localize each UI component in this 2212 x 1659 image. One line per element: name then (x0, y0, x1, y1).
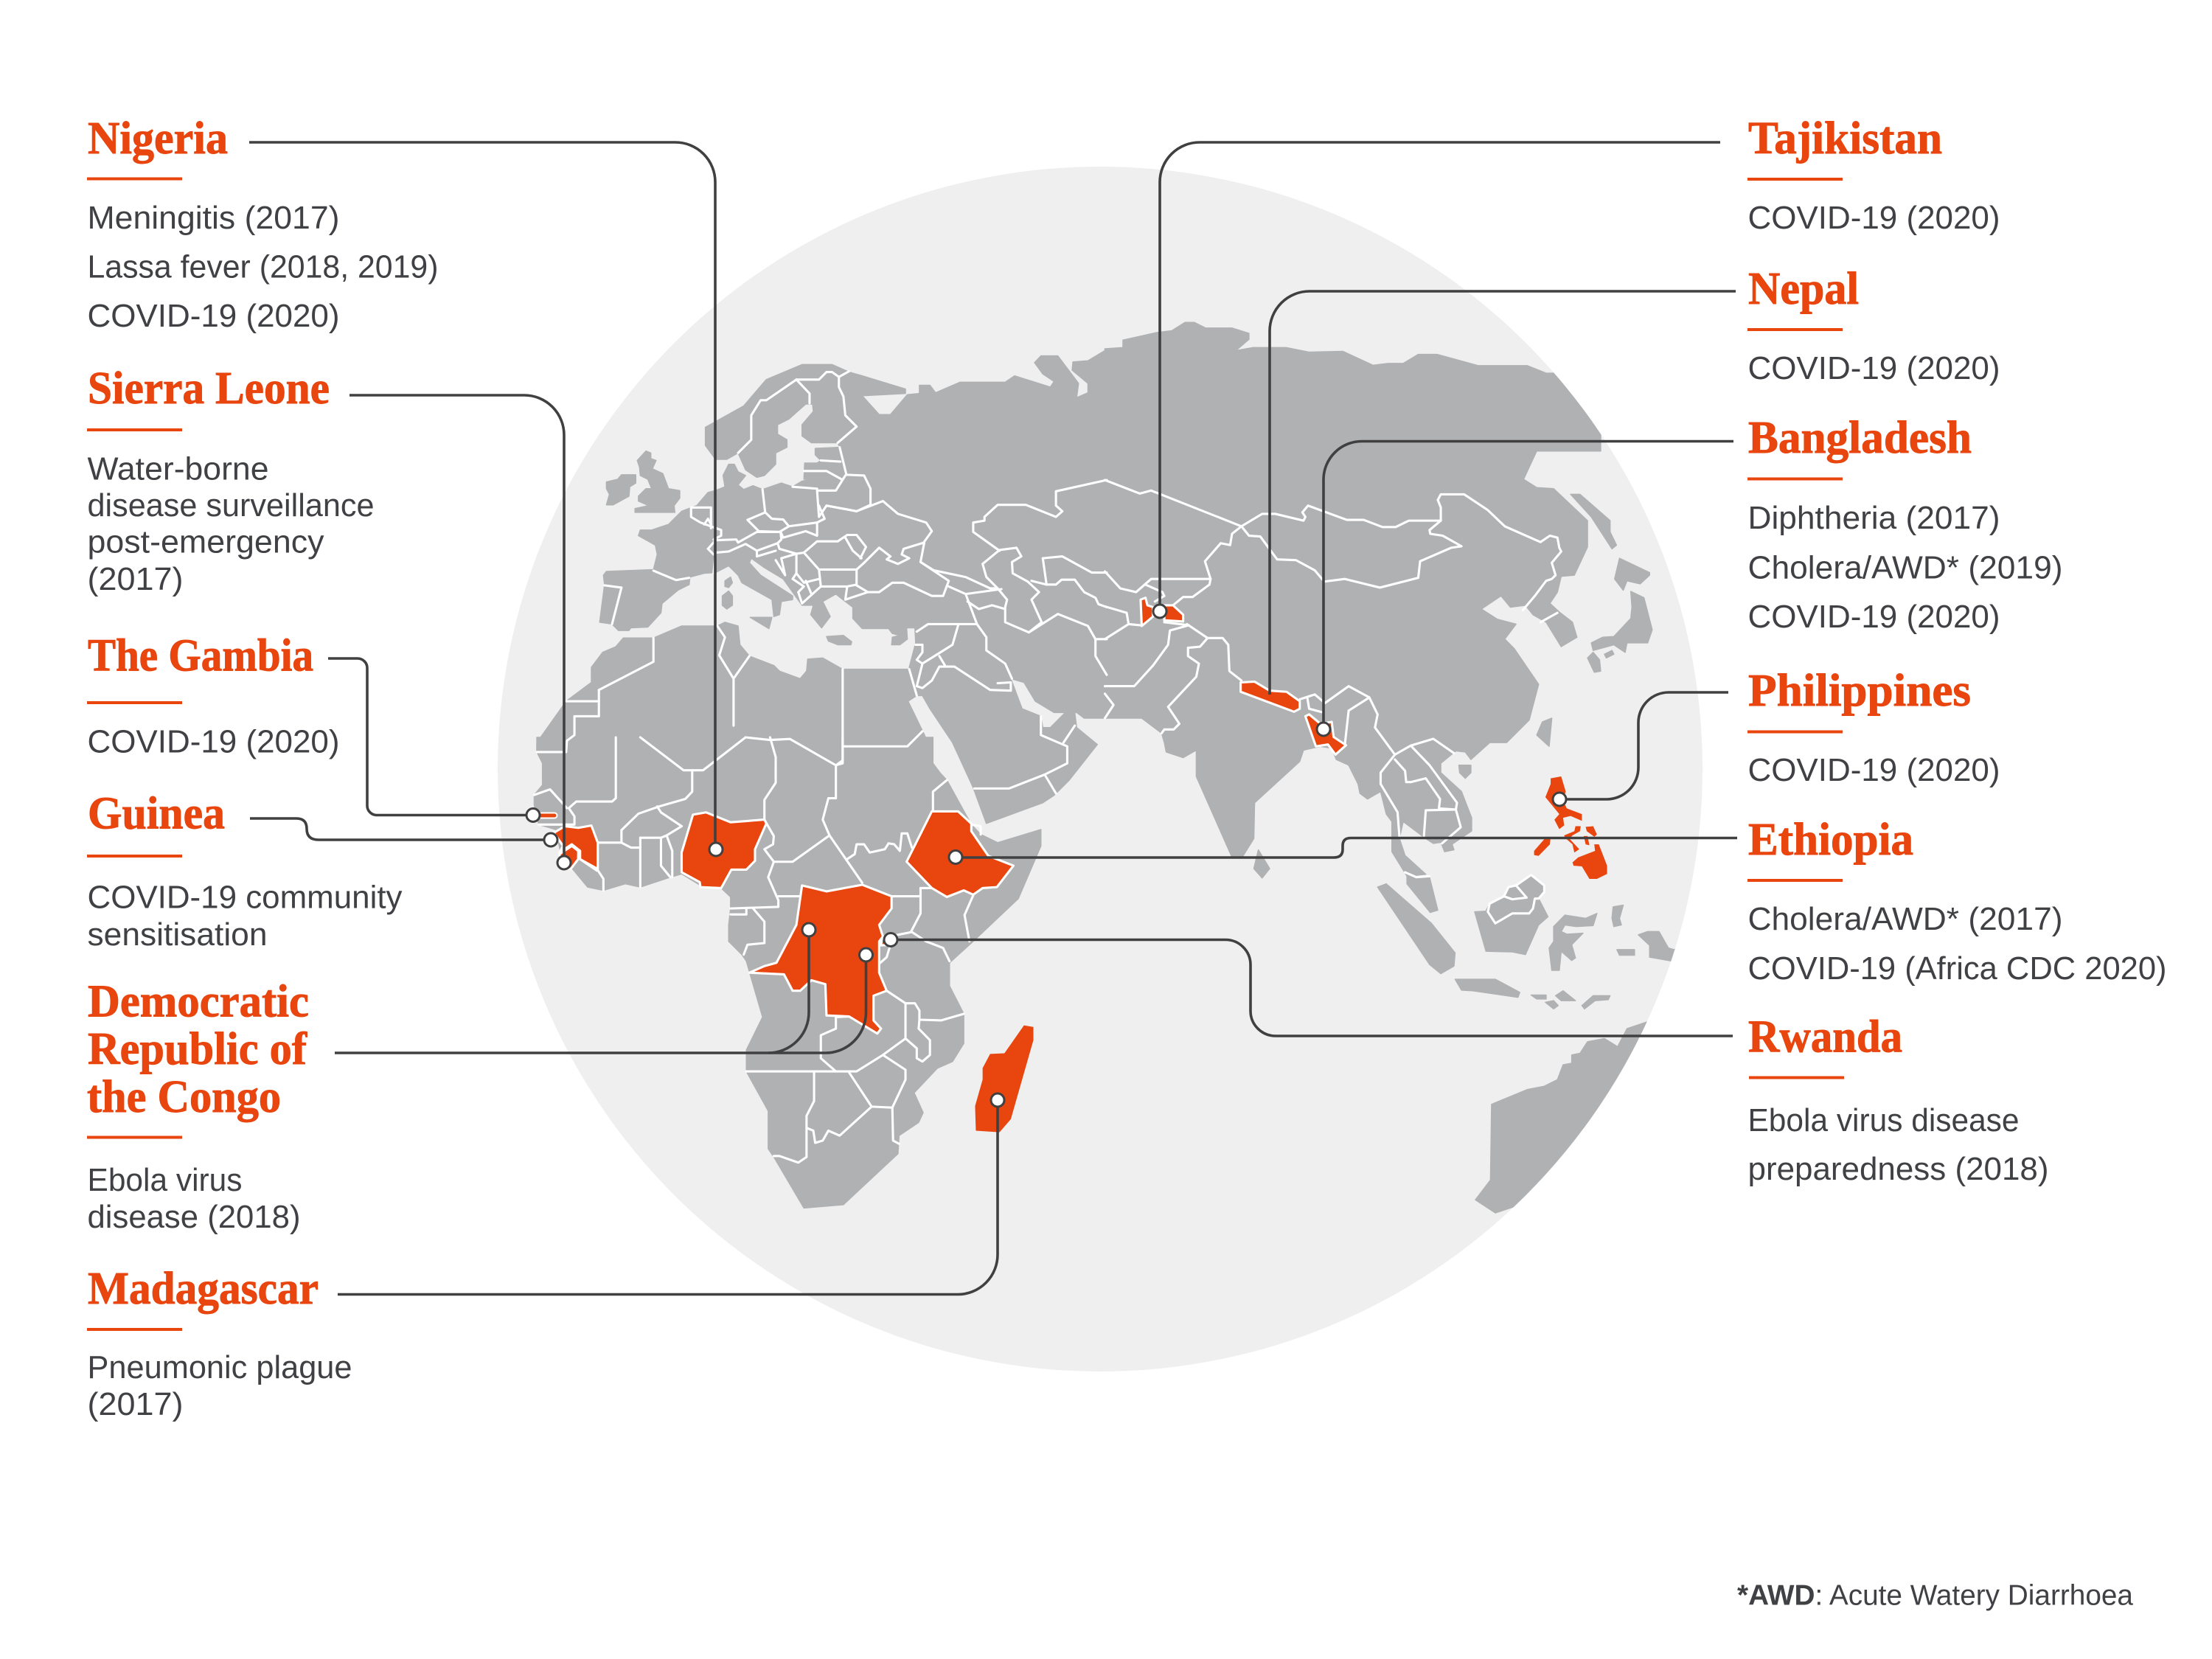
label: Philippines (1747, 666, 2000, 788)
body text: COVID-19 (2020) (1747, 200, 2000, 236)
body text: post-emergency (87, 524, 324, 560)
label: The Gambia (87, 631, 339, 759)
body text (87, 879, 403, 953)
body text: Ebola virus (87, 1162, 242, 1198)
highlighted country: Nepal (1241, 681, 1300, 712)
world map (534, 322, 1697, 1213)
land: Maritime Southeast Asia and Australia (1377, 875, 1697, 1213)
label: Ethiopia (1747, 815, 2166, 987)
body text: COVID-19 (2020) (1747, 599, 2000, 635)
body text (1747, 1102, 2048, 1187)
label: Guinea (87, 789, 403, 953)
highlighted country: Tajikistan (1141, 598, 1183, 626)
body text: Water-borne (87, 451, 268, 487)
country borders: Asia (1105, 480, 1561, 844)
leader line: Ethiopia (949, 838, 1737, 864)
body text: disease (2018) (87, 1199, 301, 1235)
body text: COVID-19 (Africa CDC 2020) (1747, 950, 2166, 987)
heading: Philippines (1748, 666, 1971, 716)
country borders: Malay Peninsula and Borneo (1405, 872, 1544, 923)
heading: Ethiopia (1748, 815, 1913, 865)
leader line: Nepal (1270, 291, 1736, 695)
leader line: The Gambia (328, 658, 540, 821)
heading: Nepal (1748, 264, 1859, 314)
body text: COVID-19 (2020) (1747, 350, 2000, 386)
body text: Ebola virus disease (1747, 1102, 2019, 1138)
leader line: Tajikistan (1153, 142, 1720, 618)
heading: The Gambia (88, 631, 313, 681)
highlighted country: Madagascar (975, 1026, 1034, 1133)
land: Asia (1105, 322, 1652, 878)
body text (87, 1162, 301, 1235)
leader line: Bangladesh (1317, 441, 1733, 736)
label: Nigeria (87, 114, 438, 334)
heading: the Congo (87, 1072, 281, 1122)
globe background (498, 167, 1703, 1371)
heading: Rwanda (1748, 1012, 1902, 1062)
heading: Madagascar (88, 1264, 319, 1314)
heading: Republic of (88, 1024, 307, 1074)
leader line: Madagascar (338, 1093, 1004, 1295)
body text: Pneumonic plague (87, 1349, 352, 1385)
label: Nepal (1747, 264, 2000, 386)
label: Bangladesh (1747, 413, 2063, 635)
highlighted country: The Gambia (540, 813, 554, 818)
body text: Meningitis (2017) (87, 200, 339, 236)
highlighted country: Philippines (1534, 776, 1607, 879)
leader line: Sierra Leone (349, 395, 571, 869)
label: Sierra Leone (87, 364, 375, 597)
label: Tajikistan (1747, 114, 2000, 236)
body text: preparedness (2018) (1747, 1151, 2048, 1187)
body text: COVID-19 community (87, 879, 403, 916)
body text: (2017) (87, 561, 183, 597)
heading: Guinea (88, 789, 225, 839)
body text: COVID-19 (2020) (1747, 752, 2000, 788)
leader line: Democratic Republic of the Congo (335, 923, 873, 1053)
leader line: Nigeria (249, 142, 723, 856)
highlighted country: Democratic Republic of the Congo (749, 885, 891, 1034)
highlighted country: Ethiopia (907, 811, 1013, 897)
body text (87, 451, 375, 597)
highlighted country: Bangladesh (1305, 714, 1346, 754)
country borders: Africa (534, 737, 981, 1163)
heading: Bangladesh (1748, 413, 1972, 463)
label: Madagascar (87, 1264, 352, 1422)
heading: Democratic (88, 976, 309, 1026)
body text (87, 200, 438, 334)
heading (87, 976, 309, 1122)
land: Sub-Saharan Africa (534, 737, 1041, 1208)
body text: Lassa fever (2018, 2019) (87, 249, 438, 285)
highlighted country: Sierra Leone (560, 846, 578, 869)
body text: sensitisation (87, 917, 267, 953)
body text (1747, 901, 2166, 987)
body text: COVID-19 (2020) (87, 298, 339, 334)
highlighted country: Nigeria (681, 813, 766, 888)
body text: COVID-19 (2020) (87, 724, 339, 759)
body text: disease surveillance (87, 487, 375, 524)
leader line: Rwanda (884, 933, 1733, 1036)
country borders: Europe and Middle East (537, 372, 1107, 793)
highlighted country: Guinea (554, 826, 598, 869)
heading: Tajikistan (1748, 114, 1942, 164)
body text: Cholera/AWD* (2017) (1747, 901, 2063, 937)
footnote: *AWD: Acute Watery Diarrhoea (1737, 1579, 2133, 1612)
label: Democratic Republic of the Congo (87, 976, 309, 1235)
leader line: Guinea (250, 818, 557, 846)
body text (1747, 500, 2063, 635)
body text (87, 1349, 352, 1422)
heading: Nigeria (88, 114, 228, 164)
highlighted country: Rwanda (880, 939, 886, 947)
heading: Sierra Leone (88, 364, 330, 414)
body text: Diphtheria (2017) (1747, 500, 2000, 536)
land: Europe, Middle East and North Africa (537, 349, 1107, 824)
label: Rwanda (1747, 1012, 2048, 1187)
body text: (2017) (87, 1386, 183, 1422)
leader line: Philippines (1553, 692, 1728, 806)
body text: Cholera/AWD* (2019) (1747, 550, 2063, 585)
